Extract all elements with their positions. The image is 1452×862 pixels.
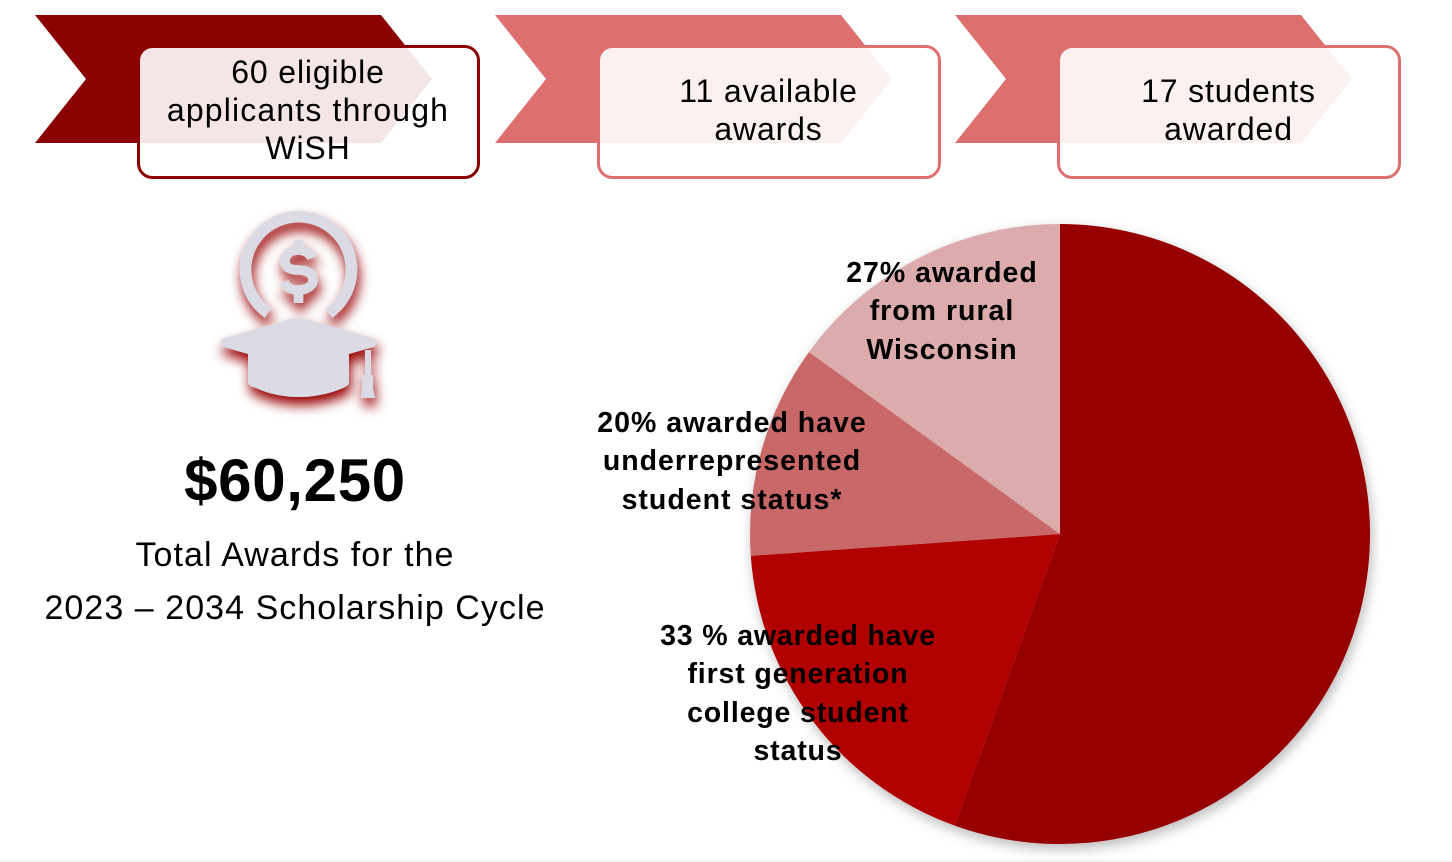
step 1 text: [167, 54, 449, 166]
step 1 text: applicants through: [167, 92, 449, 128]
coin ring: [246, 217, 352, 313]
label: rural: Wisconsin: [866, 334, 1018, 366]
label: rural: from rural: [870, 295, 1014, 327]
step 1 text: WiSH: [265, 130, 351, 166]
pie chart: [750, 224, 1370, 844]
bottom edge strip: [0, 860, 1452, 862]
slice: first generation: [751, 534, 1060, 826]
label: underrepresented: underrepresented: [603, 445, 861, 477]
cap board: [220, 318, 377, 397]
label: underrepresented: student status*: [622, 484, 842, 516]
box 3: [1058, 46, 1400, 178]
label: first generation: status: [753, 735, 843, 767]
label: first generation: college student: [687, 697, 909, 729]
total caption: [44, 536, 546, 627]
step 3 text: [1141, 73, 1316, 147]
box 1: [138, 46, 478, 178]
chevron 1: [35, 15, 432, 143]
total caption: Total Awards for the: [136, 536, 454, 574]
chevron 2: [495, 15, 892, 143]
box 2: [598, 46, 940, 178]
dollar sign: [284, 240, 313, 303]
slice: rural: [809, 224, 1060, 534]
label: rural: [846, 257, 1038, 366]
step 1 text: 60 eligible: [231, 54, 385, 90]
label: first generation: [660, 620, 936, 767]
total amount: $60,250: [184, 447, 406, 514]
label: underrepresented: [597, 407, 867, 516]
label: first generation: first generation: [687, 658, 909, 690]
chevron 3: [955, 15, 1352, 143]
label: rural: 27% awarded: [846, 257, 1038, 289]
label: first generation: 33 % awarded have: [660, 620, 936, 652]
label: underrepresented: 20% awarded have: [597, 407, 867, 439]
slice: underrepresented: [750, 352, 1060, 556]
step 2 text: awards: [714, 111, 823, 147]
total caption: 2023 – 2034 Scholarship Cycle: [44, 589, 546, 627]
step 3 text: 17 students: [1141, 73, 1316, 109]
step 3 text: awarded: [1164, 111, 1293, 147]
slice: remaining share: [955, 224, 1370, 844]
step 2 text: 11 available: [679, 73, 858, 109]
step 2 text: [679, 73, 858, 147]
tassel: [361, 350, 375, 398]
icon: graduation cap with dollar coin: [220, 217, 377, 398]
